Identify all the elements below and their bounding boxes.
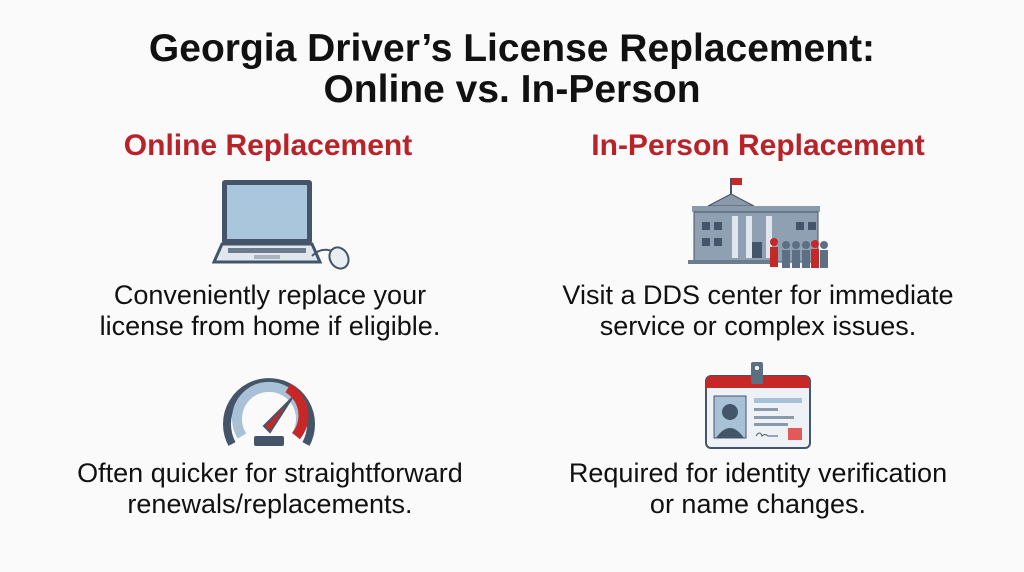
text: in-person 1 [562, 280, 954, 341]
heading: online: Online Replacement [124, 129, 412, 162]
icon: laptop [212, 180, 350, 270]
text: online 2: renewals/replacements. [127, 489, 413, 519]
text: online 1: Conveniently replace your [114, 280, 426, 310]
icon: ID badge [705, 362, 811, 449]
title [149, 27, 875, 111]
text: in-person 1: service or complex issues. [600, 311, 916, 341]
text: in-person 2 [569, 458, 947, 519]
text: online 2: Often quicker for straightforward [77, 458, 463, 488]
text: in-person 2: or name changes. [650, 489, 866, 519]
icon: building with people [688, 178, 828, 268]
text: in-person 1: Visit a DDS center for immediate [562, 280, 954, 310]
title: Online vs. In-Person [323, 68, 701, 111]
title: Georgia Driver’s License Replacement: [149, 27, 875, 70]
text: in-person 2: Required for identity verification [569, 458, 947, 488]
text: online 1 [100, 280, 440, 341]
heading: in-person: In-Person Replacement [591, 129, 925, 162]
icon: speedometer [223, 378, 315, 446]
text: online 1: license from home if eligible. [100, 311, 440, 341]
text: online 2 [77, 458, 463, 519]
